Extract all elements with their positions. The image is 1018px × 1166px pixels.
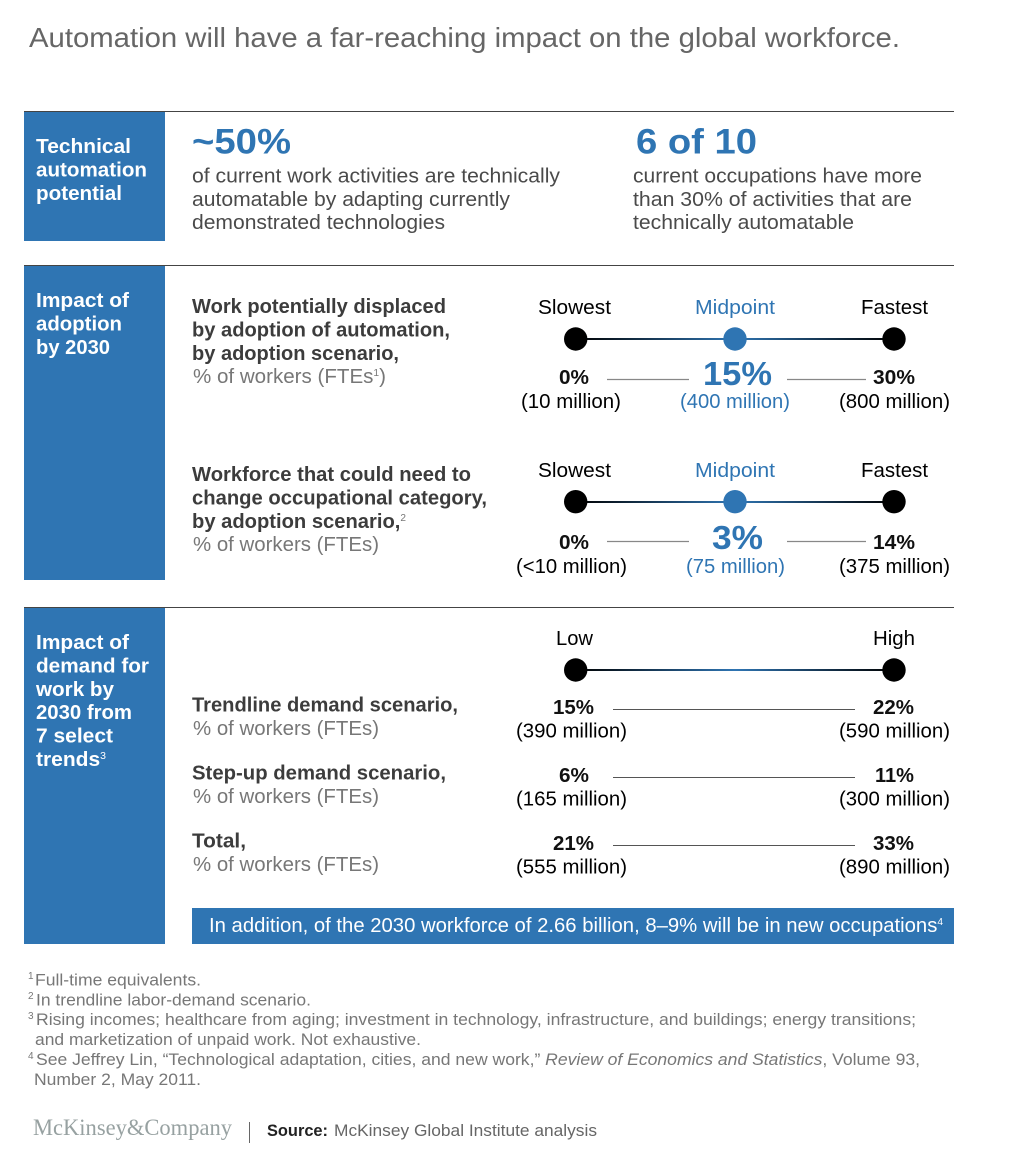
row: total: % of workers (FTEs) bbox=[193, 854, 379, 876]
stat: 6 of 10: current occupations have more bbox=[633, 166, 922, 188]
panel label: technical automation potential: Technical bbox=[36, 136, 131, 158]
chart: occupation change scenario scale: 0% bbox=[559, 532, 589, 554]
panel label: impact of demand: 2030 from bbox=[36, 702, 132, 724]
footnotes: Number 2, May 2011. bbox=[34, 1070, 201, 1089]
panel label: technical automation potential: automation bbox=[36, 160, 147, 182]
chart: occupation change scenario scale: Slowest bbox=[538, 460, 611, 482]
chart: occupation change scenario scale: (<10 million) bbox=[516, 556, 627, 578]
chart: occupation change scenario scale: Midpoint bbox=[695, 460, 775, 482]
panel label: impact of demand: trends bbox=[36, 749, 97, 771]
row: trendline demand bbox=[192, 694, 950, 742]
row: trendline demand: 22% bbox=[873, 697, 914, 719]
row: step-up demand: Step-up demand scenario, bbox=[192, 762, 446, 784]
row: trendline demand: Trendline demand scenario, bbox=[192, 694, 458, 716]
chart: work displaced scenario scale: (400 million) bbox=[680, 391, 790, 413]
text: work potentially displaced: Work potentially displaced bbox=[192, 296, 446, 318]
panel label: impact of demand: work by bbox=[35, 679, 115, 701]
source line: McKinsey Global Institute analysis bbox=[334, 1122, 597, 1140]
text: work potentially displaced: 1 bbox=[373, 368, 380, 379]
row: step-up demand: (165 million) bbox=[516, 788, 627, 810]
row: step-up demand bbox=[192, 762, 950, 810]
panel label: impact of demand: Impact of bbox=[36, 632, 129, 654]
chart: low to high scale bbox=[556, 628, 915, 682]
row: total bbox=[192, 830, 950, 878]
chart: work displaced scenario scale: 0% bbox=[559, 367, 589, 389]
callout: new occupations: In addition, of the 2030 workforce of 2.66 billion, 8–9% will be in new occupations bbox=[209, 915, 927, 937]
panel label: impact of adoption bbox=[24, 266, 165, 580]
chart: work displaced scenario scale: (800 million) bbox=[839, 391, 950, 413]
row: step-up demand: 6% bbox=[559, 765, 589, 787]
text: workforce changing occupation: 2 bbox=[400, 513, 406, 524]
footnotes: 4 bbox=[28, 1051, 34, 1062]
chart: occupation change scenario scale: (375 million) bbox=[839, 556, 950, 578]
chart: work displaced scenario scale: Midpoint bbox=[695, 297, 775, 319]
stat: about 50 percent bbox=[192, 122, 560, 234]
text: workforce changing occupation: change occupational category, bbox=[192, 488, 487, 510]
row: trendline demand: 15% bbox=[553, 697, 594, 719]
stat: 6 of 10: 6 of 10 bbox=[636, 122, 757, 162]
chart: work displaced scenario scale: (10 million) bbox=[521, 391, 621, 413]
text: work potentially displaced: by adoption of automation, bbox=[192, 320, 450, 342]
row: total: (555 million) bbox=[516, 856, 627, 878]
stat: 6 of 10: than 30% of activities that are bbox=[633, 189, 912, 211]
panel label: impact of demand bbox=[24, 608, 165, 944]
panel label: impact of demand: demand for bbox=[36, 656, 149, 678]
row: trendline demand: (390 million) bbox=[516, 720, 627, 742]
chart: occupation change scenario scale: 3% bbox=[712, 519, 763, 556]
footnotes: See Jeffrey Lin, “Technological adaptation, cities, and new work,” Review of Economics and Statistics , Volume 93, bbox=[36, 1050, 920, 1069]
panel label: technical automation potential: potential bbox=[36, 183, 122, 205]
footnotes: Full-time equivalents. bbox=[35, 970, 201, 990]
row: total: Total, bbox=[192, 830, 246, 852]
text: workforce changing occupation bbox=[192, 464, 487, 556]
stat: about 50 percent: of current work activities are technically bbox=[192, 166, 560, 188]
row: trendline demand: % of workers (FTEs) bbox=[193, 718, 379, 740]
chart: work displaced scenario scale bbox=[521, 297, 950, 413]
text: workforce changing occupation: % of workers (FTEs) bbox=[193, 534, 379, 556]
chart: low to high scale: Low bbox=[556, 628, 594, 650]
stat: about 50 percent: automatable by adapting currently bbox=[192, 189, 510, 211]
panel: impact of adoption by 2030 bbox=[24, 266, 954, 580]
panel: impact of demand for work bbox=[24, 608, 954, 944]
text: work potentially displaced: by adoption scenario, bbox=[192, 343, 399, 365]
title: Automation will have a far-reaching impact on the global workforce. bbox=[29, 22, 900, 53]
chart: occupation change scenario scale: Fastest bbox=[861, 460, 928, 482]
footnotes: In trendline labor-demand scenario. bbox=[36, 990, 311, 1010]
footnotes: and marketization of unpaid work. Not exhaustive. bbox=[35, 1030, 421, 1049]
text: workforce changing occupation: by adoption scenario, bbox=[192, 511, 399, 533]
logo: McKinsey and Company: McKinsey&Company bbox=[33, 1115, 232, 1140]
footnotes: 2 bbox=[28, 991, 34, 1002]
chart: work displaced scenario scale: Fastest bbox=[861, 297, 928, 319]
row: trendline demand: (590 million) bbox=[839, 720, 950, 742]
stat: about 50 percent: demonstrated technologies bbox=[192, 212, 445, 234]
callout: new occupations: 4 bbox=[937, 917, 943, 928]
footnotes: 1 bbox=[28, 971, 34, 982]
source line: Source: bbox=[267, 1122, 328, 1140]
footnotes: Rising incomes; healthcare from aging; investment in technology, infrastructure, and buildings; energy transitions; bbox=[36, 1010, 916, 1029]
footnotes: 3 bbox=[28, 1011, 34, 1022]
stat: 6 of 10 bbox=[633, 122, 922, 234]
panel label: impact of demand: 7 select bbox=[36, 726, 113, 748]
text: work potentially displaced: ) bbox=[379, 366, 386, 388]
chart: low to high scale: High bbox=[873, 628, 915, 650]
chart: work displaced scenario scale: 30% bbox=[873, 367, 915, 389]
row: step-up demand: (300 million) bbox=[839, 788, 950, 810]
panel label: impact of adoption: Impact of bbox=[36, 290, 129, 312]
chart: occupation change scenario scale: (75 million) bbox=[686, 556, 785, 578]
row: total: 33% bbox=[873, 833, 914, 855]
callout: new occupations bbox=[192, 908, 954, 944]
panel label: technical automation potential bbox=[24, 112, 165, 241]
row: step-up demand: % of workers (FTEs) bbox=[193, 786, 379, 808]
row: total: 21% bbox=[553, 833, 594, 855]
panel label: impact of adoption: adoption bbox=[36, 314, 122, 336]
panel label: impact of demand: 3 bbox=[100, 751, 106, 762]
row: step-up demand: 11% bbox=[875, 765, 914, 787]
chart: work displaced scenario scale: Slowest bbox=[538, 297, 611, 319]
panel label: impact of adoption: by 2030 bbox=[36, 337, 110, 359]
stat: 6 of 10: technically automatable bbox=[633, 212, 854, 234]
stat: about 50 percent: ~50% bbox=[192, 122, 291, 162]
row: total: (890 million) bbox=[839, 856, 950, 878]
text: workforce changing occupation: Workforce that could need to bbox=[192, 464, 471, 486]
footnotes bbox=[28, 970, 920, 1089]
chart: occupation change scenario scale: 14% bbox=[873, 532, 915, 554]
chart: occupation change scenario scale bbox=[516, 460, 950, 578]
text: work potentially displaced: % of workers (FTEs bbox=[193, 366, 369, 388]
chart: work displaced scenario scale: 15% bbox=[703, 355, 772, 392]
text: work potentially displaced bbox=[192, 296, 450, 388]
panel: technical automation potential bbox=[24, 112, 954, 241]
